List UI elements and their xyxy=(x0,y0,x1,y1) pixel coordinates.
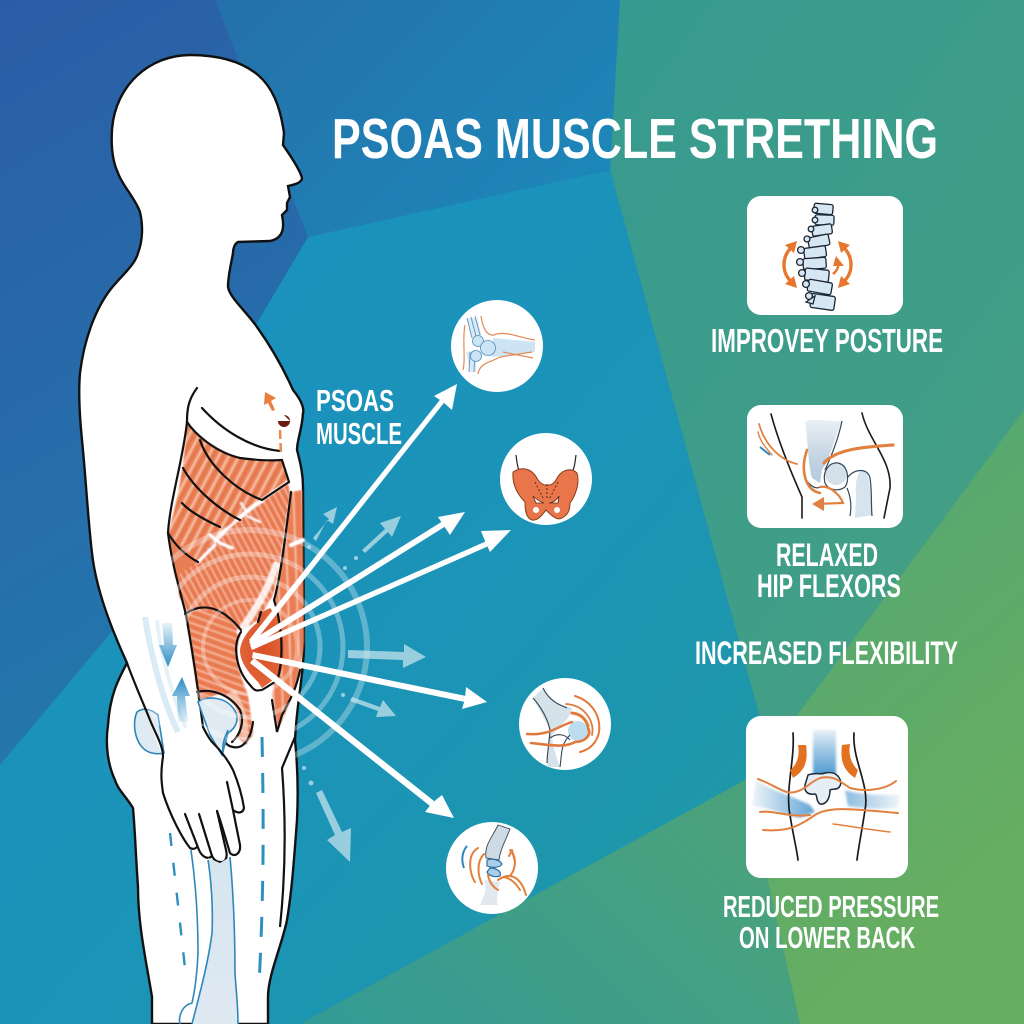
circle: knee joint xyxy=(451,300,543,392)
card: improved posture xyxy=(747,196,903,315)
leg bones and dashed lines xyxy=(170,730,295,1024)
arm motion arrows xyxy=(145,617,190,732)
hip joint front xyxy=(198,698,237,755)
hand and arm xyxy=(127,663,244,862)
arrow to joint circle xyxy=(249,384,457,644)
muscle group xyxy=(168,388,304,755)
circle: knee rotation xyxy=(446,822,538,914)
label: reduced pressure on lower back: ON LOWER BACK xyxy=(739,920,915,955)
white fascia xyxy=(198,482,303,632)
hip joint back xyxy=(135,709,164,754)
anatomical outlines xyxy=(168,388,300,747)
label: relaxed hip flexors: HIP FLEXORS xyxy=(757,568,901,604)
faded secondary arrows xyxy=(302,507,426,862)
card: reduced pressure xyxy=(746,716,908,878)
label: psoas muscle xyxy=(316,383,402,451)
solid lower-left patch xyxy=(168,533,198,600)
human figure xyxy=(79,55,367,1024)
label: psoas muscle: PSOAS xyxy=(316,383,394,418)
muscle fill xyxy=(168,422,304,745)
concentric rings xyxy=(133,530,367,764)
main white arrows xyxy=(249,384,511,818)
right strip xyxy=(272,490,304,730)
label: relaxed hip flexors: RELAXED xyxy=(776,537,878,573)
label: psoas muscle: MUSCLE xyxy=(316,416,402,451)
lower iliac section xyxy=(185,610,253,745)
upper oblique xyxy=(168,422,289,577)
label: reduced pressure on lower back xyxy=(723,889,939,955)
icon: orange arrows xyxy=(784,246,851,283)
icon: spine xyxy=(797,203,836,311)
arrow to pelvis circle xyxy=(250,530,511,650)
arrow to knee circle xyxy=(252,652,487,709)
card: relaxed hip flexors xyxy=(747,405,903,528)
circle: hip arcs xyxy=(519,678,611,770)
small orange arrow and dot xyxy=(264,392,290,455)
circle: pelvis xyxy=(500,433,592,525)
label: relaxed hip flexors xyxy=(757,537,901,604)
psoas center xyxy=(240,608,284,688)
lateral fan xyxy=(175,482,290,632)
pale wash over lower section xyxy=(225,690,248,742)
arrow to lower circle xyxy=(250,658,454,818)
arrow upper right xyxy=(249,512,465,647)
body silhouette xyxy=(79,55,304,1024)
